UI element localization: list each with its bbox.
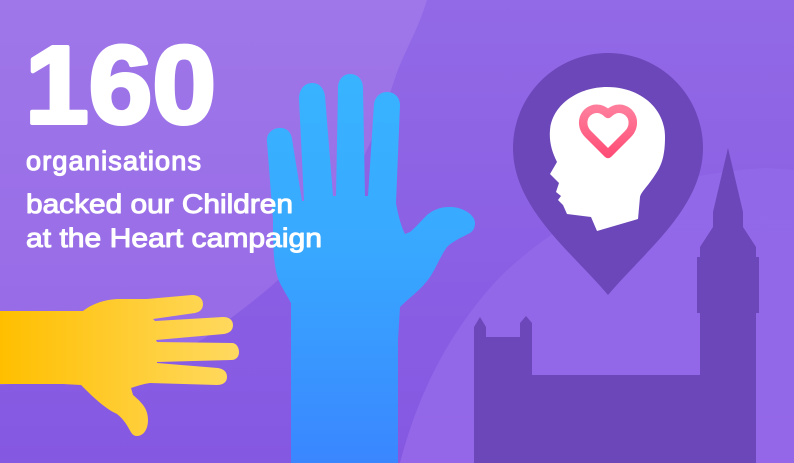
big number: 160	[25, 24, 216, 147]
background shape: upper-left lighter area	[0, 0, 427, 385]
text: campaign line two: at the Heart campaign	[26, 223, 322, 253]
icon: raised blue hand	[267, 74, 475, 463]
background shape: lower-right lighter area	[400, 168, 794, 463]
icon: yellow hand reaching from left	[0, 295, 239, 436]
icon: location pin with head and heart	[513, 53, 703, 295]
text: organisations: organisations	[26, 146, 201, 176]
icon: Parliament and Big Ben silhouette	[474, 148, 759, 463]
text: campaign line one: backed our Children	[26, 189, 293, 219]
headline text	[25, 24, 322, 253]
head profile	[550, 87, 665, 231]
heart outline	[583, 109, 633, 154]
pin	[513, 53, 703, 295]
